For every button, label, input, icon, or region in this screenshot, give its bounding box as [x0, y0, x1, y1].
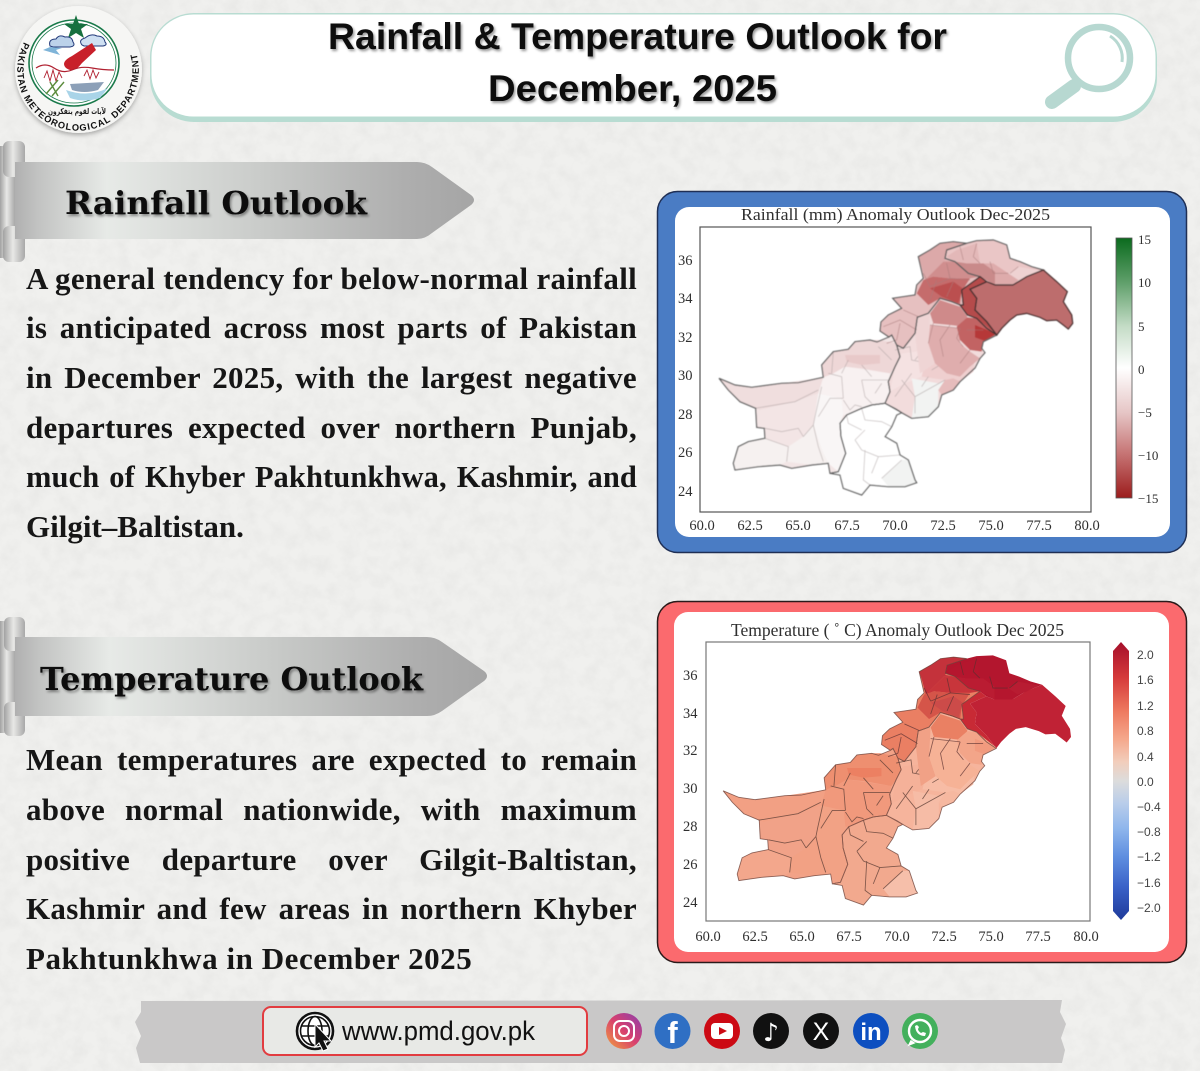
icon: linkedin: in — [860, 1019, 882, 1046]
icon: linkedin — [853, 1013, 889, 1049]
colour bar: −0.4 — [1137, 800, 1161, 814]
panel: rainfall map — [658, 192, 1186, 552]
colour bar: 1.6 — [1137, 673, 1154, 687]
x and y axis labels: 28 — [678, 407, 692, 423]
text block: rainfall outlook: A general tendency for below-normal rainfall — [26, 261, 637, 296]
x and y axis labels: 36 — [683, 668, 698, 684]
colour bar — [1113, 642, 1161, 920]
title: December, 2025 — [488, 68, 777, 109]
x and y axis labels: 67.5 — [836, 929, 862, 945]
colour bar: −15 — [1138, 491, 1158, 506]
x and y axis labels: 62.5 — [737, 518, 763, 534]
text block: temperature outlook: Mean temperatures are expected to remain — [26, 742, 637, 777]
text block: temperature outlook: Pakhtunkhwa in December 2025 — [26, 941, 472, 976]
x and y axis labels: 30 — [678, 368, 692, 384]
footer strip — [135, 1000, 1066, 1063]
colour bar: 2.0 — [1137, 648, 1154, 662]
title — [328, 16, 947, 109]
colour bar: 10 — [1138, 275, 1151, 290]
x and y axis labels: 34 — [678, 291, 693, 307]
x and y axis labels: 75.0 — [978, 518, 1004, 534]
x and y axis labels: 30 — [683, 781, 698, 797]
x and y axis labels: 28 — [683, 819, 698, 835]
plot frame — [706, 642, 1090, 921]
logo ring text: PAKISTAN METEOROLOGICAL DEPARTMENT — [17, 42, 139, 131]
banner: Temperature Outlook — [0, 617, 487, 736]
colour bar: −1.6 — [1137, 876, 1161, 890]
x and y axis labels: 26 — [678, 445, 692, 461]
colour bar: −10 — [1138, 448, 1158, 463]
icon: X — [803, 1013, 839, 1049]
map: temperature anomaly — [723, 655, 1071, 905]
text block: rainfall outlook: much of Khyber Pakhtunkhwa, Kashmir, and — [26, 460, 637, 494]
text block: temperature outlook — [26, 742, 637, 976]
plot frame — [700, 227, 1091, 512]
text block: rainfall outlook: departures expected over northern Punjab, — [26, 410, 637, 445]
colour bar: −2.0 — [1137, 901, 1161, 915]
colour bar: −0.8 — [1137, 825, 1161, 839]
heading: Rainfall Outlook — [65, 184, 368, 222]
website box — [263, 1007, 587, 1055]
x and y axis labels: 26 — [683, 857, 698, 873]
icon: whatsapp — [902, 1013, 938, 1049]
logo: Pakistan Meteorological Department — [12, 6, 144, 138]
x and y axis labels: 60.0 — [695, 929, 721, 945]
icon: instagram — [606, 1013, 642, 1049]
x and y axis labels: 36 — [678, 253, 692, 269]
x and y axis labels — [678, 253, 1100, 534]
x and y axis labels — [683, 668, 1099, 945]
x and y axis labels: 72.5 — [931, 929, 957, 945]
text block: temperature outlook: above normal nationwide, with maximum — [26, 792, 637, 827]
x and y axis labels: 62.5 — [742, 929, 768, 945]
text block: rainfall outlook: in December 2025, with the largest negative — [26, 360, 637, 395]
colour bar — [1116, 232, 1158, 506]
text block: temperature outlook: positive departure over Gilgit-Baltistan, — [26, 842, 637, 877]
chart title: Temperature ( ˚ C) Anomaly Outlook Dec 2025 — [731, 620, 1064, 640]
colour bar: 0.8 — [1137, 724, 1154, 738]
icon: youtube — [704, 1013, 740, 1049]
text block: temperature outlook: Kashmir and few areas in northern Khyber — [26, 891, 637, 926]
x and y axis labels: 32 — [683, 743, 698, 759]
x and y axis labels: 70.0 — [882, 518, 908, 534]
x and y axis labels: 60.0 — [689, 518, 715, 534]
map: rainfall anomaly — [719, 240, 1073, 495]
x and y axis labels: 77.5 — [1025, 929, 1051, 945]
chart title: Rainfall (mm) Anomaly Outlook Dec-2025 — [741, 205, 1050, 224]
colour bar: 0 — [1138, 362, 1144, 377]
text block: rainfall outlook — [26, 261, 637, 544]
heading: Temperature Outlook — [40, 660, 424, 698]
x and y axis labels: 67.5 — [834, 518, 860, 534]
icon: facebook — [654, 1013, 690, 1050]
x and y axis labels: 80.0 — [1073, 929, 1099, 945]
x and y axis labels: 65.0 — [785, 518, 811, 534]
icon: magnifying glass — [1052, 27, 1130, 102]
x and y axis labels: 80.0 — [1074, 518, 1100, 534]
colour bar: 15 — [1138, 232, 1151, 247]
colour bar: 0.4 — [1137, 750, 1154, 764]
colour bar: −1.2 — [1137, 850, 1161, 864]
x and y axis labels: 70.0 — [884, 929, 910, 945]
title: Rainfall & Temperature Outlook for — [328, 16, 947, 57]
text block: rainfall outlook: Gilgit–Baltistan. — [26, 509, 244, 544]
banner: Rainfall Outlook — [0, 141, 474, 262]
x and y axis labels: 72.5 — [930, 518, 956, 534]
icon: X: X — [813, 1018, 830, 1046]
colour bar: 5 — [1138, 319, 1144, 334]
x and y axis labels: 24 — [683, 895, 698, 911]
icon: tiktok: ♪ — [763, 1018, 779, 1047]
panel: temperature map — [658, 602, 1186, 962]
x and y axis labels: 34 — [683, 706, 698, 722]
x and y axis labels: 32 — [678, 330, 692, 346]
x and y axis labels: 24 — [678, 484, 693, 500]
x and y axis labels: 75.0 — [978, 929, 1004, 945]
x and y axis labels: 65.0 — [789, 929, 815, 945]
icon: tiktok — [753, 1013, 789, 1049]
icon: globe with cursor — [297, 1013, 333, 1051]
x and y axis labels: 77.5 — [1026, 518, 1052, 534]
colour bar: −5 — [1138, 405, 1152, 420]
colour bar: 1.2 — [1137, 699, 1154, 713]
logo motto: لآيات لقوم يتفكرون — [48, 106, 106, 116]
colour bar: 0.0 — [1137, 775, 1154, 789]
text block: rainfall outlook: is anticipated across most parts of Pakistan — [26, 310, 637, 345]
header title panel — [150, 13, 1157, 122]
website address: www.pmd.gov.pk — [341, 1016, 535, 1046]
icon: facebook: f — [667, 1015, 678, 1050]
